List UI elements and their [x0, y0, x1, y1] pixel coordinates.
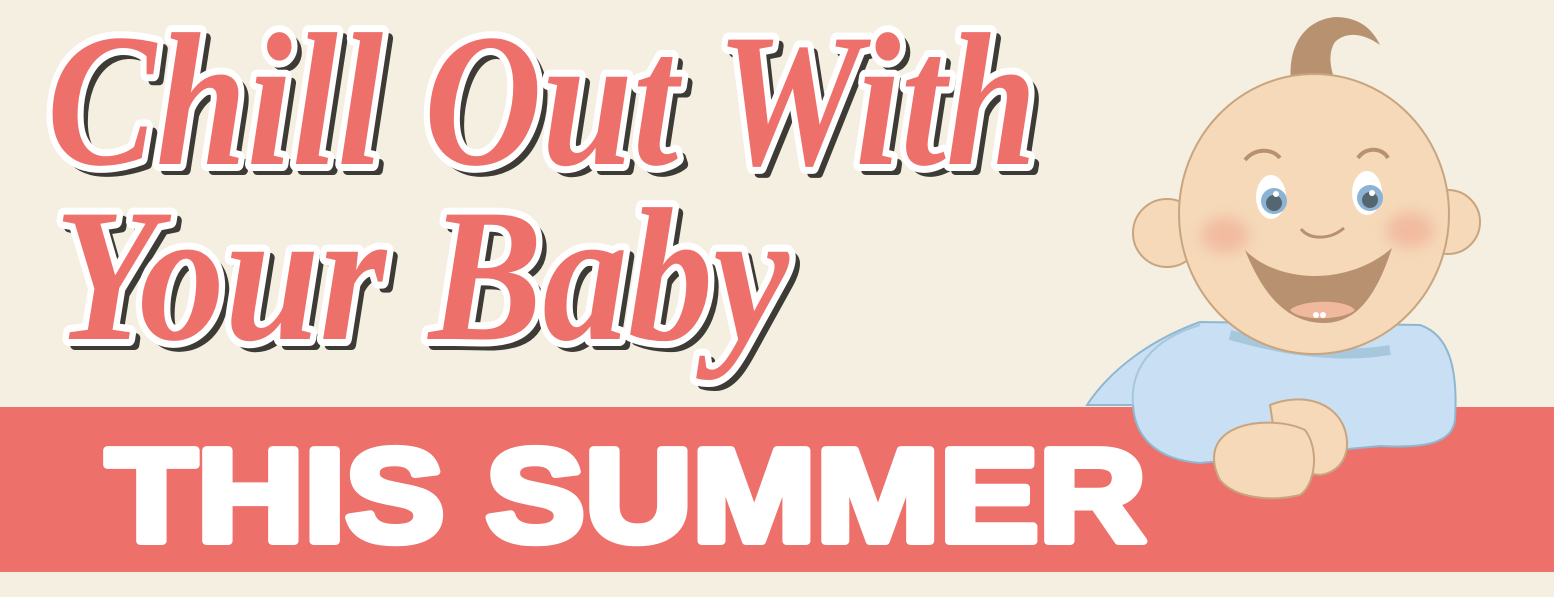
- cheeks: [1201, 217, 1249, 253]
- eyebrows: [1245, 151, 1280, 160]
- body: [1087, 322, 1456, 463]
- baby illustration: [1087, 17, 1480, 498]
- eyes: [1256, 175, 1286, 219]
- subtitle: THIS SUMMER: THIS SUMMER: [106, 422, 1146, 569]
- head: [1179, 74, 1449, 354]
- red band: [0, 407, 1554, 572]
- title: Chill Out With: [53, 2, 1043, 212]
- title: Chill Out With: [47, 0, 1037, 206]
- title: Your Baby: [60, 177, 796, 387]
- hair curl: [1291, 17, 1380, 80]
- title: [47, 0, 1043, 387]
- mouth: [1245, 248, 1392, 323]
- nose: [1301, 228, 1344, 237]
- hands: [1270, 399, 1347, 475]
- title: Your Baby: [54, 171, 790, 381]
- ears: [1133, 199, 1201, 267]
